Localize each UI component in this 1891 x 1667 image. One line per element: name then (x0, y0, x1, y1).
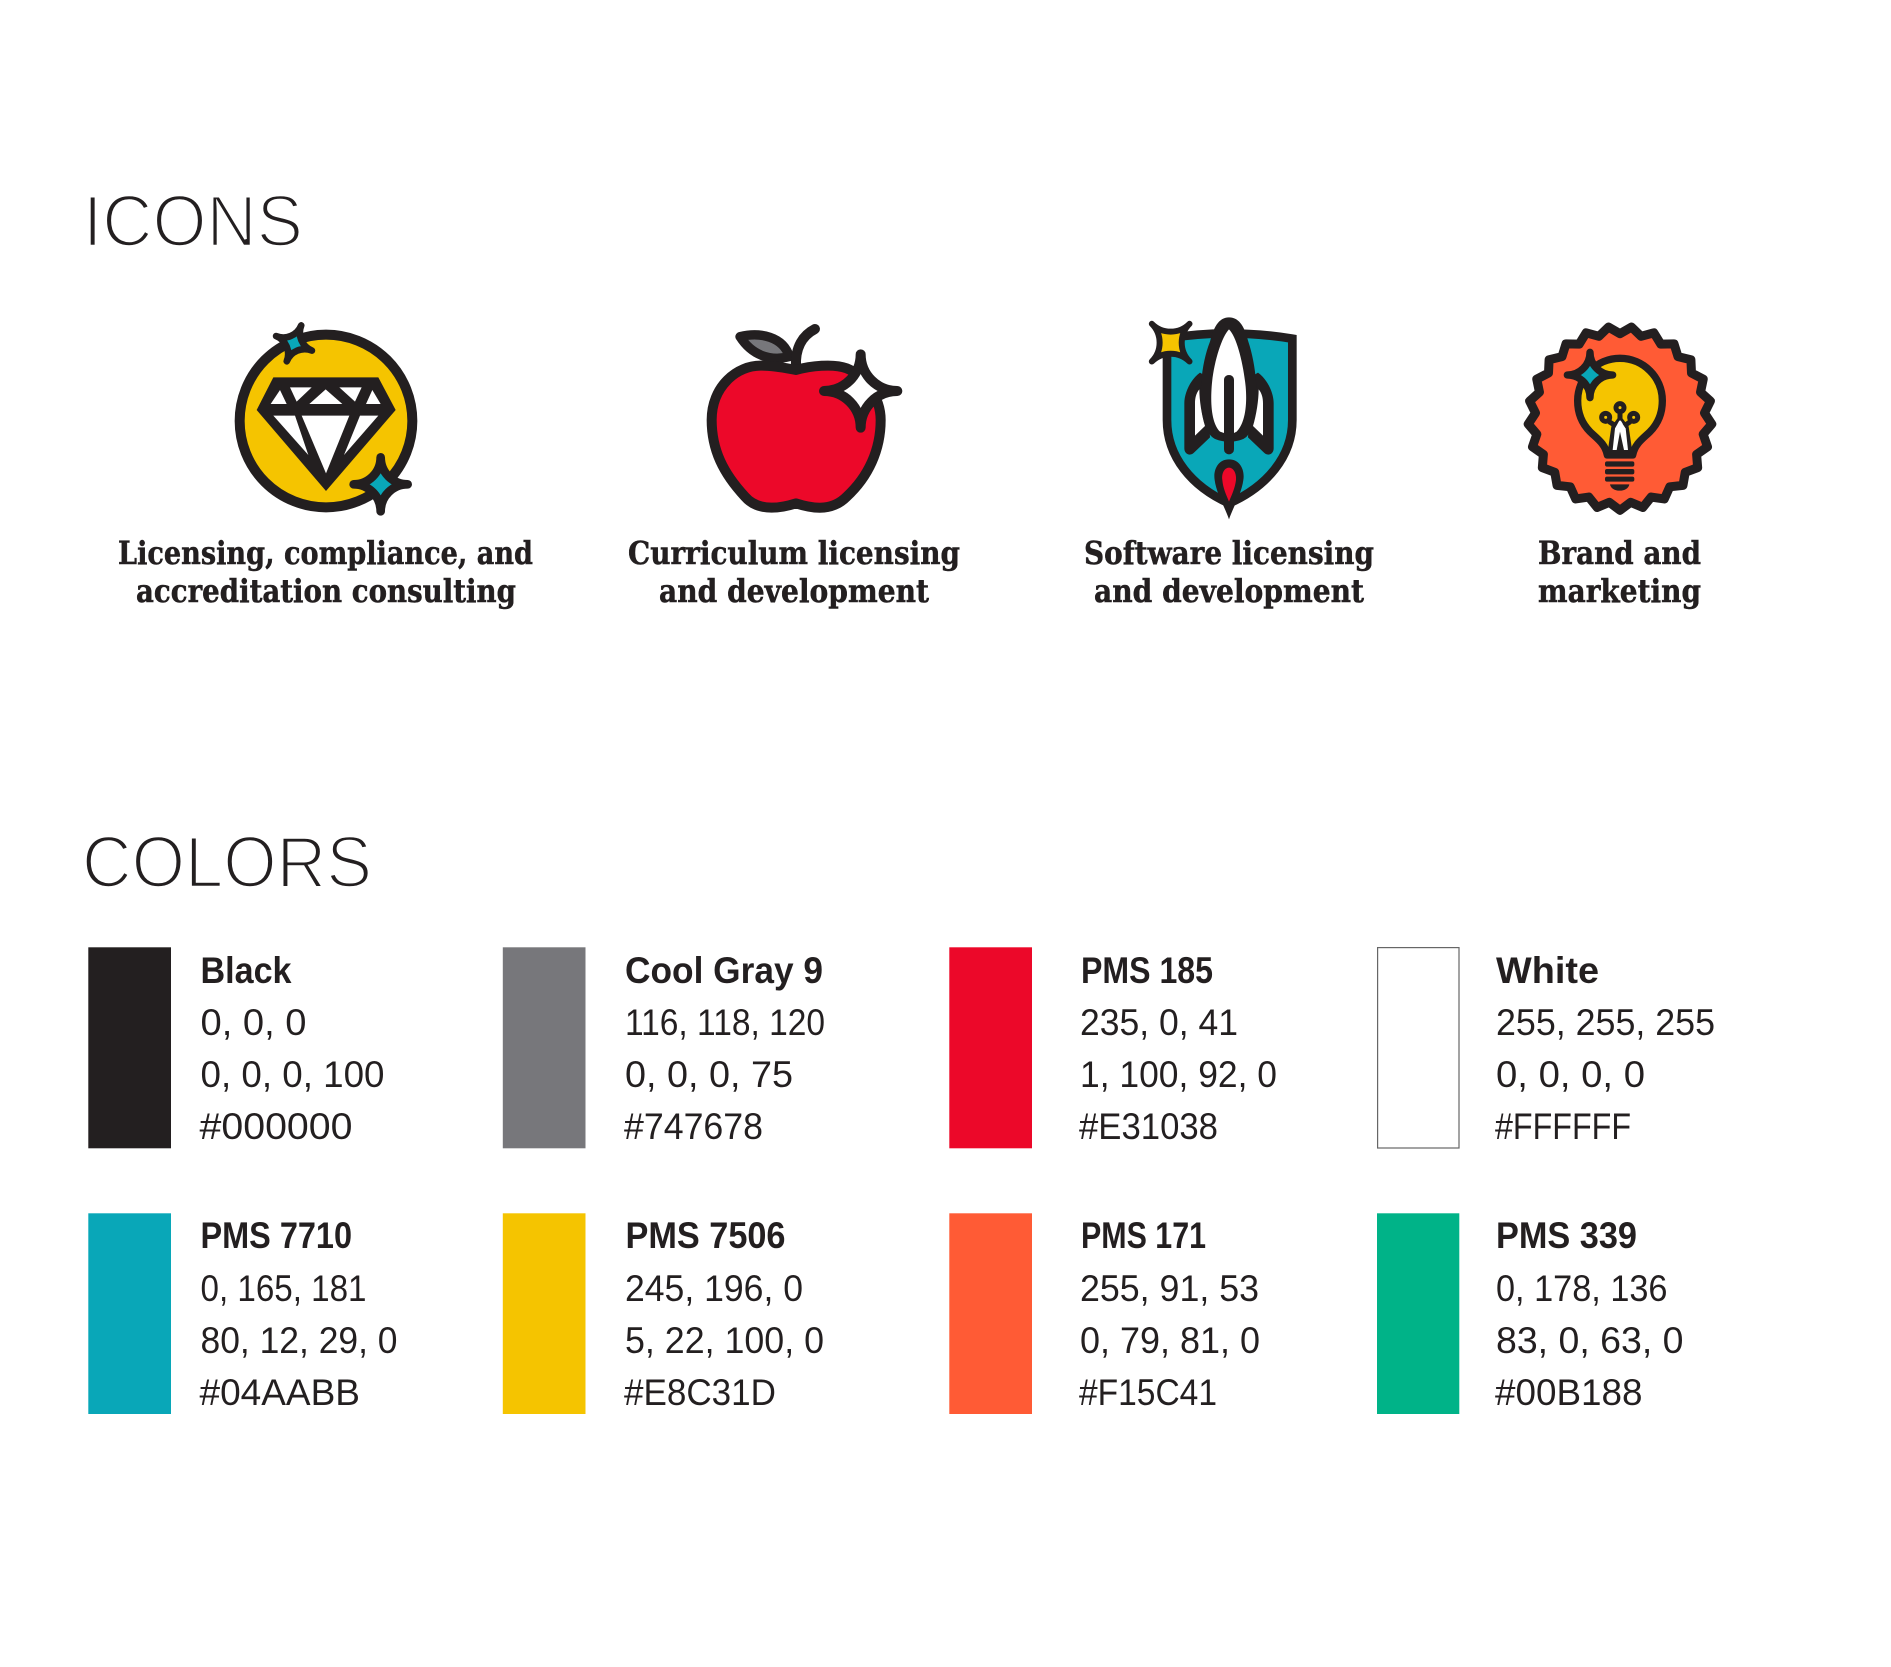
caption: licensing: accreditation consulting (136, 572, 516, 610)
color entry: Black: 0, 0, 0 (200, 1002, 306, 1043)
caption: curriculum: Curriculum licensing (628, 534, 960, 572)
caption: software: Software licensing (1084, 534, 1374, 572)
color entry: PMS 7710: 0, 165, 181 (200, 1268, 366, 1309)
color entry: Black: Black (200, 950, 292, 991)
color entry: PMS 339: 83, 0, 63, 0 (1496, 1320, 1684, 1361)
color entry: Black: #000000 (200, 1106, 352, 1147)
color entry: PMS 7506: #E8C31D (624, 1372, 776, 1413)
heading: ICONS: ICONS (83, 182, 303, 262)
color entry: PMS 7710 (88, 1213, 398, 1414)
color entry: PMS 171 (949, 1213, 1260, 1414)
panel: licensing, compliance, and accreditation consulting (118, 318, 544, 610)
caption: licensing: Licensing, compliance, and (118, 534, 533, 572)
color entry: PMS 185: 235, 0, 41 (1080, 1002, 1238, 1043)
color entry: Cool Gray 9: 0, 0, 0, 75 (625, 1054, 793, 1095)
color entry: White (1378, 948, 1715, 1148)
color entry: PMS 339 (1377, 1213, 1684, 1414)
panel: software licensing and development (1084, 305, 1385, 610)
color entry: PMS 185 (949, 947, 1277, 1148)
icon: red apple with sparkle (712, 329, 897, 508)
color entry: Black (88, 947, 385, 1148)
color entry: PMS 7710: PMS 7710 (200, 1215, 352, 1256)
icon: light bulb on orange badge (1528, 327, 1712, 510)
color entry: PMS 185: 1, 100, 92, 0 (1080, 1054, 1277, 1095)
color entry: PMS 7506: PMS 7506 (626, 1215, 786, 1256)
color entry: PMS 7506: 5, 22, 100, 0 (625, 1320, 824, 1361)
color entry: PMS 7506: 245, 196, 0 (625, 1268, 803, 1309)
icon: diamond in yellow circle with sparkles (240, 318, 412, 511)
color entry: PMS 7506 (503, 1213, 824, 1414)
color entry: Cool Gray 9: #747678 (624, 1106, 763, 1147)
color entry: PMS 339: PMS 339 (1496, 1215, 1637, 1256)
panel: curriculum licensing and development (628, 329, 971, 610)
color entry: PMS 7710: 80, 12, 29, 0 (200, 1320, 398, 1361)
color entry: PMS 171: PMS 171 (1081, 1215, 1206, 1256)
color entry: Black: 0, 0, 0, 100 (200, 1054, 384, 1095)
color entry: PMS 171: 0, 79, 81, 0 (1080, 1320, 1260, 1361)
icon: rocket on teal shield (1133, 305, 1292, 519)
caption: software: and development (1094, 572, 1364, 610)
color entry: PMS 7710: #04AABB (200, 1372, 360, 1413)
color entry: White: #FFFFFF (1495, 1106, 1631, 1147)
color entry: PMS 339: 0, 178, 136 (1496, 1268, 1668, 1309)
heading: COLORS: COLORS (82, 823, 372, 903)
caption: brand: marketing (1538, 572, 1701, 610)
caption: curriculum: and development (659, 572, 929, 610)
color entry: Cool Gray 9 (503, 947, 825, 1148)
caption: brand: Brand and (1538, 534, 1701, 572)
color entry: PMS 339: #00B188 (1495, 1372, 1642, 1413)
color entry: White: White (1496, 950, 1599, 991)
color entry: PMS 171: #F15C41 (1079, 1372, 1217, 1413)
panel: brand and marketing (1528, 327, 1712, 610)
color entry: Cool Gray 9: Cool Gray 9 (625, 950, 823, 991)
color entry: White: 255, 255, 255 (1496, 1002, 1715, 1043)
color entry: PMS 185: #E31038 (1079, 1106, 1218, 1147)
color entry: PMS 185: PMS 185 (1081, 950, 1213, 991)
color entry: PMS 171: 255, 91, 53 (1080, 1268, 1259, 1309)
color entry: Cool Gray 9: 116, 118, 120 (625, 1002, 825, 1043)
color entry: White: 0, 0, 0, 0 (1496, 1054, 1645, 1095)
